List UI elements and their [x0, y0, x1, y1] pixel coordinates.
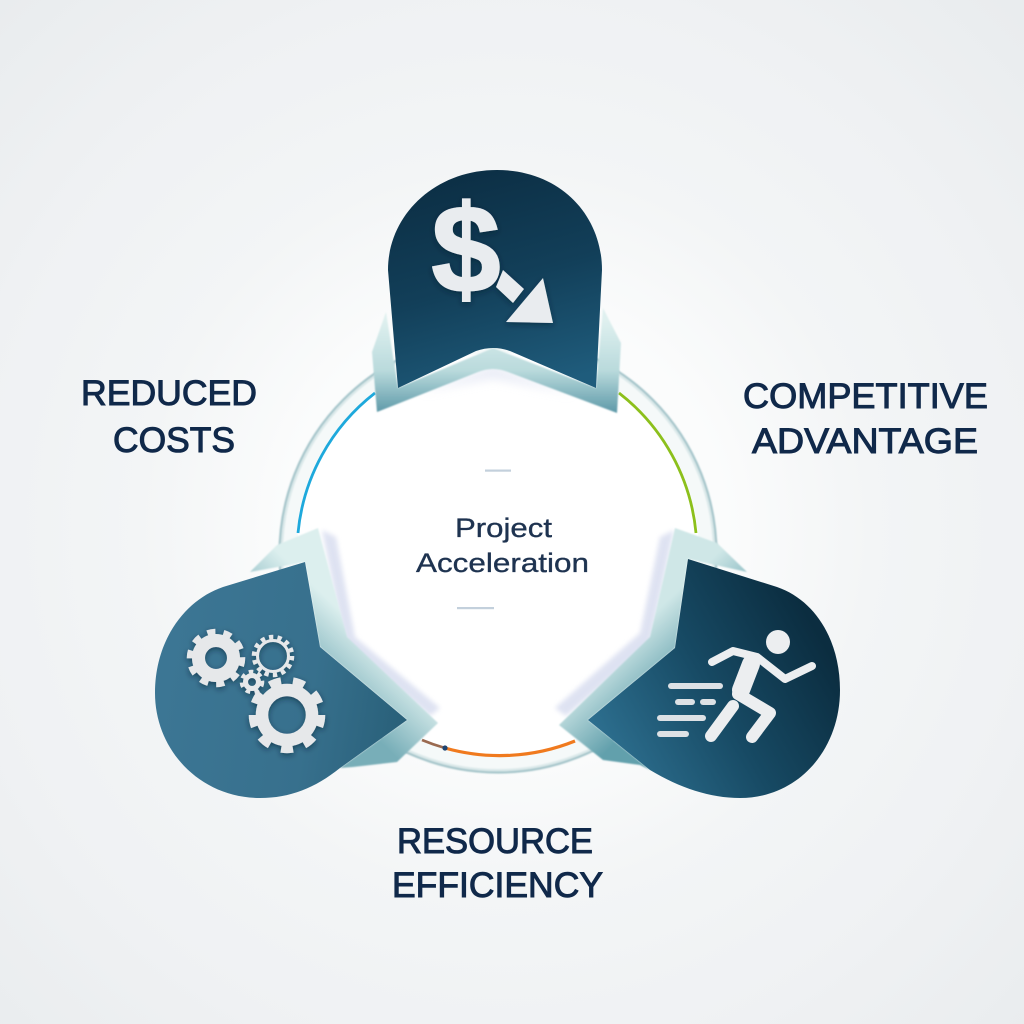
collar	[559, 528, 747, 770]
label: competitive advantage: COMPETITIVE	[743, 376, 988, 416]
medium gear	[190, 632, 242, 684]
lavender glow	[555, 530, 674, 716]
label: resource efficiency: EFFICIENCY	[392, 865, 603, 905]
panel: left pin, resource efficiency	[155, 528, 440, 798]
large gear	[253, 681, 321, 749]
collar	[372, 308, 621, 413]
label: resource efficiency: RESOURCE	[397, 821, 593, 861]
arrow head	[506, 278, 553, 323]
label: reduced costs: COSTS	[113, 420, 235, 460]
outline gear	[254, 637, 292, 675]
front leg	[738, 694, 770, 737]
title: Project Acceleration: Project	[455, 513, 553, 543]
label: resource efficiency	[392, 821, 603, 905]
navy marker dot	[442, 745, 448, 751]
upper dash	[485, 470, 511, 472]
arms	[712, 651, 812, 679]
pin body	[155, 562, 407, 798]
speed lines	[660, 686, 720, 734]
small gear	[242, 672, 262, 692]
title: Project Acceleration: Acceleration	[416, 548, 589, 578]
icon: gears	[190, 632, 321, 749]
icon: running figure	[660, 630, 812, 737]
collar	[250, 528, 438, 768]
label: competitive advantage: ADVANTAGE	[752, 421, 978, 461]
centre disc	[297, 353, 699, 755]
blue arc	[298, 393, 375, 533]
panel: right pin, competitive advantage	[555, 528, 840, 798]
lower dash	[457, 607, 494, 609]
ring band	[280, 336, 716, 772]
label: competitive advantage	[743, 376, 988, 461]
dollar sign: $	[432, 181, 500, 319]
panel: top pin, reduced costs	[372, 170, 621, 413]
label: reduced costs	[81, 373, 257, 460]
pin body	[388, 170, 602, 388]
lavender glow	[420, 366, 575, 394]
green arc	[619, 393, 696, 533]
head	[766, 630, 790, 654]
brown arc	[422, 740, 445, 748]
orange arc	[445, 741, 575, 756]
label: reduced costs: REDUCED	[81, 373, 257, 413]
progress ring	[280, 336, 716, 772]
arrow shaft	[496, 270, 524, 303]
pin body	[588, 559, 840, 798]
back leg	[711, 706, 733, 736]
centre label	[416, 470, 589, 609]
torso	[741, 664, 751, 690]
title: Project Acceleration	[416, 513, 589, 578]
icon: dollar with down arrow	[432, 181, 553, 323]
lavender glow	[322, 530, 440, 716]
